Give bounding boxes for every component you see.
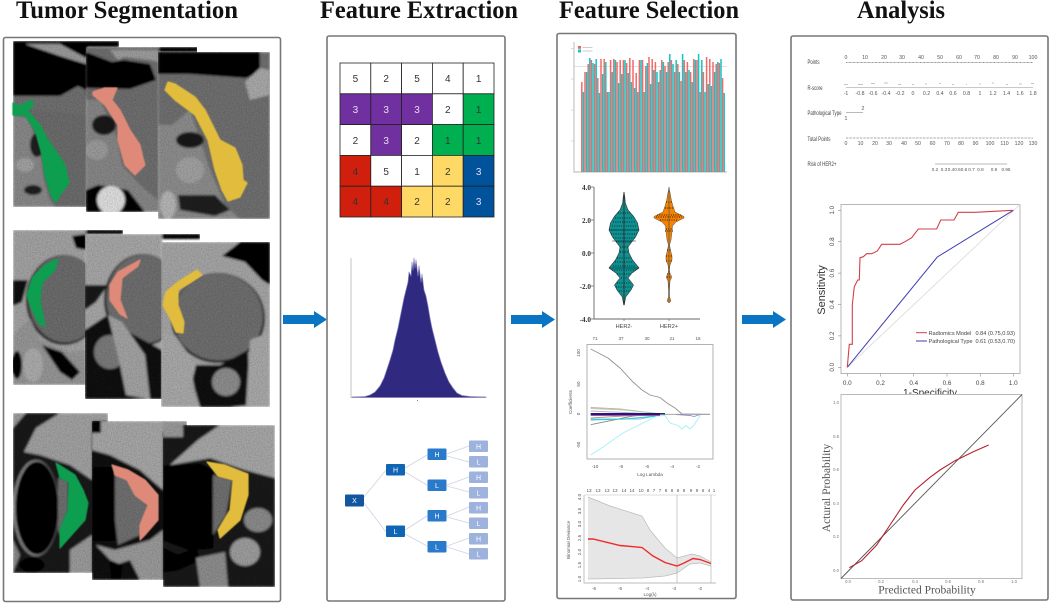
nomogram: 0.6 xyxy=(949,91,957,97)
CT row 3 xyxy=(13,413,275,587)
segmentation: green row 1 xyxy=(13,100,69,203)
GLSZM matrix grid: 3 xyxy=(383,105,389,116)
segmentation: red row 3 xyxy=(112,465,158,540)
nomogram: 50 xyxy=(915,141,921,147)
calibration curve: 1.0 xyxy=(1011,579,1018,584)
GLSZM matrix grid: 4 xyxy=(353,167,359,178)
nomogram: 80 xyxy=(958,141,964,147)
nomogram: Points xyxy=(808,60,820,66)
GLSZM matrix grid: 3 xyxy=(476,167,482,178)
nomogram: -1 xyxy=(844,91,848,97)
histogram xyxy=(351,258,486,401)
LASSO coefficient paths xyxy=(568,336,713,477)
nomogram: 0.6 xyxy=(961,167,968,172)
ROC curve: 0.4 xyxy=(829,300,836,309)
violin plot xyxy=(580,184,700,330)
nomogram: 20 xyxy=(881,55,887,61)
LASSO coefficient paths: 21 xyxy=(669,336,675,341)
GLSZM matrix grid: 5 xyxy=(383,167,389,178)
GLSZM matrix grid: 5 xyxy=(353,74,359,85)
ROC curve: Sensitivity xyxy=(816,265,828,315)
violin: HER2+ xyxy=(654,187,684,303)
LASSO coefficient paths: 30 xyxy=(644,336,650,341)
panel: tumor segmentation xyxy=(4,38,280,602)
calibration curve: 0.2 xyxy=(878,579,885,584)
violin: HER2- xyxy=(609,192,639,305)
tree level 3: H xyxy=(476,506,481,512)
ROC curve: 0.0 xyxy=(829,362,836,372)
nomogram: 0.95 xyxy=(1002,167,1011,172)
arrow: segmentation to extraction xyxy=(283,311,327,328)
GLSZM matrix grid: 1 xyxy=(414,167,420,178)
LASSO coefficient paths: -2 xyxy=(696,464,700,469)
GLSZM matrix grid: 2 xyxy=(414,197,420,208)
GLSZM matrix grid: 4 xyxy=(445,74,451,85)
cross-validation deviance curve: -4 xyxy=(645,586,649,591)
calibration curve: 0.6 xyxy=(945,579,952,584)
cross-validation deviance curve: -3 xyxy=(672,586,676,591)
violin plot: 0.0 xyxy=(582,250,591,258)
segmentation: red row 1 xyxy=(93,88,145,175)
violin plot: -4.0 xyxy=(580,316,591,324)
nomogram: Pathological Type xyxy=(808,111,842,117)
segmentation: green row 2 xyxy=(27,259,58,327)
cross-validation deviance curve: 3.0 xyxy=(577,520,582,527)
tree root: X xyxy=(352,498,357,505)
GLSZM matrix grid: 4 xyxy=(353,197,359,208)
nomogram: 90 xyxy=(973,141,978,147)
cross-validation deviance curve: Binomial Deviance xyxy=(566,521,571,559)
nomogram: 1.6 xyxy=(1016,91,1024,97)
GLSZM matrix grid: 2 xyxy=(414,136,420,147)
ROC curve: 0.2 xyxy=(876,380,885,387)
nomogram: 40 xyxy=(918,55,924,61)
calibration curve: 0.4 xyxy=(912,579,919,584)
wavelet decomposition tree xyxy=(345,440,488,560)
ROC legend: 0.61 (0.53,0.70) xyxy=(976,339,1015,345)
LASSO coefficient paths: -8 xyxy=(619,464,623,469)
nomogram: 1.4 xyxy=(1003,91,1010,97)
nomogram: R-score xyxy=(808,86,823,92)
nomogram: Total Points xyxy=(808,137,830,143)
cross-validation deviance curve: -5 xyxy=(618,586,622,591)
nomogram: 70 xyxy=(944,141,950,147)
violin plot: 2.0 xyxy=(582,217,591,225)
cross-validation deviance curve: 14 xyxy=(629,488,635,493)
nomogram: 0.2 xyxy=(932,167,939,172)
calibration curve: 1.0 xyxy=(833,400,840,405)
cross-validation deviance curve: -2 xyxy=(698,586,702,591)
nomogram: 100 xyxy=(1029,55,1037,61)
calibration curve: 0.8 xyxy=(833,434,840,439)
nomogram: 0.8 xyxy=(963,91,970,97)
cross-validation deviance curve: -6 xyxy=(592,586,596,591)
violin plot: HER2- xyxy=(616,324,633,330)
LASSO coefficient paths: 16 xyxy=(695,336,701,341)
tree level 2 xyxy=(428,448,446,552)
GLSZM matrix grid: 2 xyxy=(445,197,451,208)
nomogram: 0.9 xyxy=(991,167,998,172)
tree level 3: H xyxy=(476,475,481,482)
nomogram: 2 xyxy=(862,106,865,112)
GLSZM matrix grid: 2 xyxy=(383,74,389,85)
tree level 3: L xyxy=(477,460,481,466)
cross-validation deviance curve: 6 xyxy=(702,488,705,493)
CT row 2 xyxy=(12,230,270,407)
cross-validation deviance curve: Log(λ) xyxy=(643,592,657,597)
nomogram xyxy=(808,55,1037,172)
nomogram: 0.5 xyxy=(954,167,961,172)
violin plot: HER2+ xyxy=(660,324,678,330)
nomogram: -0.2 xyxy=(896,91,905,97)
GLSZM matrix grid: 4 xyxy=(383,197,389,208)
cross-validation deviance curve: 7 xyxy=(659,488,662,493)
nomogram: 130 xyxy=(1029,141,1037,147)
tree level 3: L xyxy=(477,490,481,498)
LASSO coefficient paths: 71 xyxy=(592,336,598,341)
GLSZM matrix grid: 3 xyxy=(383,136,389,147)
nomogram: 1.8 xyxy=(1029,91,1037,97)
CT row 1 xyxy=(13,41,270,219)
nomogram: 120 xyxy=(1015,141,1023,147)
ROC legend xyxy=(916,331,1015,345)
GLSZM matrix grid: 3 xyxy=(414,105,420,116)
LASSO coefficient paths: Log Lambda xyxy=(637,472,663,477)
cross-validation deviance curve: 4.0 xyxy=(577,493,582,500)
cross-validation deviance curve: 14 xyxy=(621,488,627,493)
nomogram: 80 xyxy=(993,55,999,61)
cross-validation deviance curve: 8 xyxy=(677,488,680,493)
ROC legend: Pathological Type xyxy=(928,339,973,345)
ROC curve xyxy=(816,204,1020,399)
nomogram: 30 xyxy=(899,55,905,61)
cross-validation deviance curve: 9 xyxy=(696,488,699,493)
GLSZM matrix grid: 2 xyxy=(445,105,451,116)
LASSO coefficient paths: -10 xyxy=(592,464,599,469)
cross-validation deviance curve: 1 xyxy=(713,488,716,493)
nomogram: 0.7 xyxy=(968,167,975,172)
nomogram: 1.2 xyxy=(989,91,997,97)
ROC legend: Radiomics Model xyxy=(928,331,971,337)
calibration curve: 0.6 xyxy=(833,467,840,472)
LASSO coefficient paths: -50 xyxy=(576,441,581,448)
violin plot: -2.0 xyxy=(580,283,591,291)
calibration curve: 0.8 xyxy=(978,579,985,584)
GLSZM matrix grid: 1 xyxy=(445,136,451,147)
nomogram: 0.2 xyxy=(923,91,930,97)
ROC curve: 0.4 xyxy=(909,380,919,387)
ROC curve: 0.0 xyxy=(843,380,852,387)
bar chart xyxy=(571,42,727,172)
GLSZM matrix grid: 1 xyxy=(476,136,482,147)
LASSO coefficient paths: Coefficients xyxy=(568,389,573,414)
GLSZM matrix grid: 1 xyxy=(476,74,482,85)
ROC curve: 0.8 xyxy=(829,237,836,246)
panel: analysis xyxy=(791,36,1048,600)
cross-validation deviance curve: 13 xyxy=(595,488,601,493)
nomogram: 50 xyxy=(937,55,943,61)
cross-validation deviance curve: 13 xyxy=(612,488,618,493)
calibration curve xyxy=(821,394,1022,596)
nomogram: 70 xyxy=(974,55,980,61)
GLSZM matrix grid xyxy=(340,63,494,217)
cross-validation deviance curve: 9 xyxy=(690,488,693,493)
tree level 1: H xyxy=(393,468,398,474)
tree level 2: H xyxy=(434,514,440,520)
arrow: extraction to selection xyxy=(511,311,555,328)
cross-validation deviance curve: 2.5 xyxy=(577,534,582,541)
cross-validation deviance curve: 2.0 xyxy=(577,548,582,555)
nomogram: 110 xyxy=(1000,141,1009,147)
nomogram: 0 xyxy=(845,141,848,147)
segmentation: yellow row 3 xyxy=(207,462,248,538)
nomogram: -0.6 xyxy=(869,91,878,97)
cross-validation deviance curve: 8 xyxy=(665,488,668,493)
GLSZM matrix grid: 3 xyxy=(476,197,482,208)
calibration curve: 0.0 xyxy=(845,579,852,584)
calibration curve: 0.4 xyxy=(833,501,840,506)
arrow: selection to analysis xyxy=(742,311,786,328)
ROC curve: 0.6 xyxy=(829,268,836,277)
segmentation: red row 2 xyxy=(110,260,140,318)
cross-validation deviance curve: 1.0 xyxy=(577,575,582,582)
cross-validation deviance curve: 8 xyxy=(671,488,674,493)
ROC curve: 0.6 xyxy=(943,380,952,387)
tree level 2: L xyxy=(435,544,439,552)
ROC curve: 0.2 xyxy=(829,331,836,340)
calibration curve: 0.0 xyxy=(833,568,840,573)
cross-validation deviance curve: 13 xyxy=(586,488,592,493)
nomogram: 0.4 xyxy=(936,91,944,97)
LASSO coefficient paths: 37 xyxy=(618,336,624,341)
tree level 3: L xyxy=(477,552,481,558)
nomogram: 1 xyxy=(845,116,848,122)
tree level 3: H xyxy=(476,536,481,544)
cross-validation deviance curve: 4 xyxy=(708,488,711,493)
cross-validation deviance curve: 13 xyxy=(604,488,610,493)
segmentation: yellow row 1 xyxy=(165,82,247,201)
cross-validation deviance curve xyxy=(566,488,716,597)
segmentation: green row 3 xyxy=(56,463,88,548)
tree level 3: L xyxy=(477,521,481,528)
calibration curve: 0.2 xyxy=(833,534,840,539)
nomogram: 100 xyxy=(986,141,994,147)
tree level 3 xyxy=(469,440,488,560)
ROC curve: 1-Specificity xyxy=(903,388,957,399)
panel: feature selection xyxy=(557,34,736,598)
nomogram: Risk of HER2+ xyxy=(808,162,837,168)
GLSZM matrix grid: 1 xyxy=(476,105,482,116)
nomogram: 40 xyxy=(901,141,907,147)
nomogram: 60 xyxy=(956,55,962,61)
ROC curve: 1.0 xyxy=(1009,380,1018,387)
nomogram: 1 xyxy=(979,91,982,97)
cross-validation deviance curve: 3.5 xyxy=(577,507,582,514)
nomogram: 10 xyxy=(862,55,868,61)
panel: feature extraction xyxy=(327,34,1048,601)
nomogram: 90 xyxy=(1012,55,1018,61)
LASSO coefficient paths: 100 xyxy=(576,349,581,357)
nomogram: 60 xyxy=(930,141,935,147)
tree level 3: H xyxy=(476,444,481,451)
tree root xyxy=(345,494,364,506)
LASSO coefficient paths: -4 xyxy=(670,464,674,469)
ROC curve: 0.8 xyxy=(976,380,985,387)
tree level 2: L xyxy=(435,483,439,490)
tree level 1 xyxy=(386,464,405,537)
LASSO coefficient paths: 0 xyxy=(576,412,581,415)
cross-validation deviance curve: 10 xyxy=(638,488,644,493)
GLSZM matrix grid: 3 xyxy=(353,105,359,116)
GLSZM matrix grid: 2 xyxy=(445,167,451,178)
cross-validation deviance curve: 8 xyxy=(683,488,686,493)
LASSO coefficient paths: -6 xyxy=(645,464,649,469)
nomogram: 30 xyxy=(886,141,892,147)
cross-validation deviance curve: 1.5 xyxy=(577,561,582,568)
GLSZM matrix grid: 2 xyxy=(353,136,359,147)
nomogram: -0.4 xyxy=(882,91,891,97)
cross-validation deviance curve: 7 xyxy=(653,488,656,493)
ROC legend: 0.84 (0.75,0.93) xyxy=(976,331,1015,337)
nomogram: 0 xyxy=(845,55,848,61)
nomogram: 0.8 xyxy=(977,167,984,172)
nomogram: -0.8 xyxy=(856,91,865,97)
nomogram: 0.4 xyxy=(948,167,955,172)
calibration curve: Actural Probability xyxy=(821,444,833,532)
ROC curve: 1.0 xyxy=(829,205,836,215)
violin plot: 4.0 xyxy=(582,184,591,192)
cross-validation deviance curve: 8 xyxy=(647,488,650,493)
bar chart legend xyxy=(578,46,592,52)
LASSO coefficient paths: 50 xyxy=(576,381,581,387)
nomogram: 10 xyxy=(858,141,863,147)
GLSZM matrix grid: 5 xyxy=(414,74,420,85)
calibration curve: Predicted Probability xyxy=(878,584,976,596)
tree level 1: L xyxy=(394,529,398,536)
segmentation: yellow row 2 xyxy=(163,270,202,333)
tree level 2: H xyxy=(434,452,440,459)
nomogram: 20 xyxy=(872,141,878,147)
nomogram: 0.3 xyxy=(941,167,948,172)
nomogram: 0 xyxy=(912,91,915,97)
